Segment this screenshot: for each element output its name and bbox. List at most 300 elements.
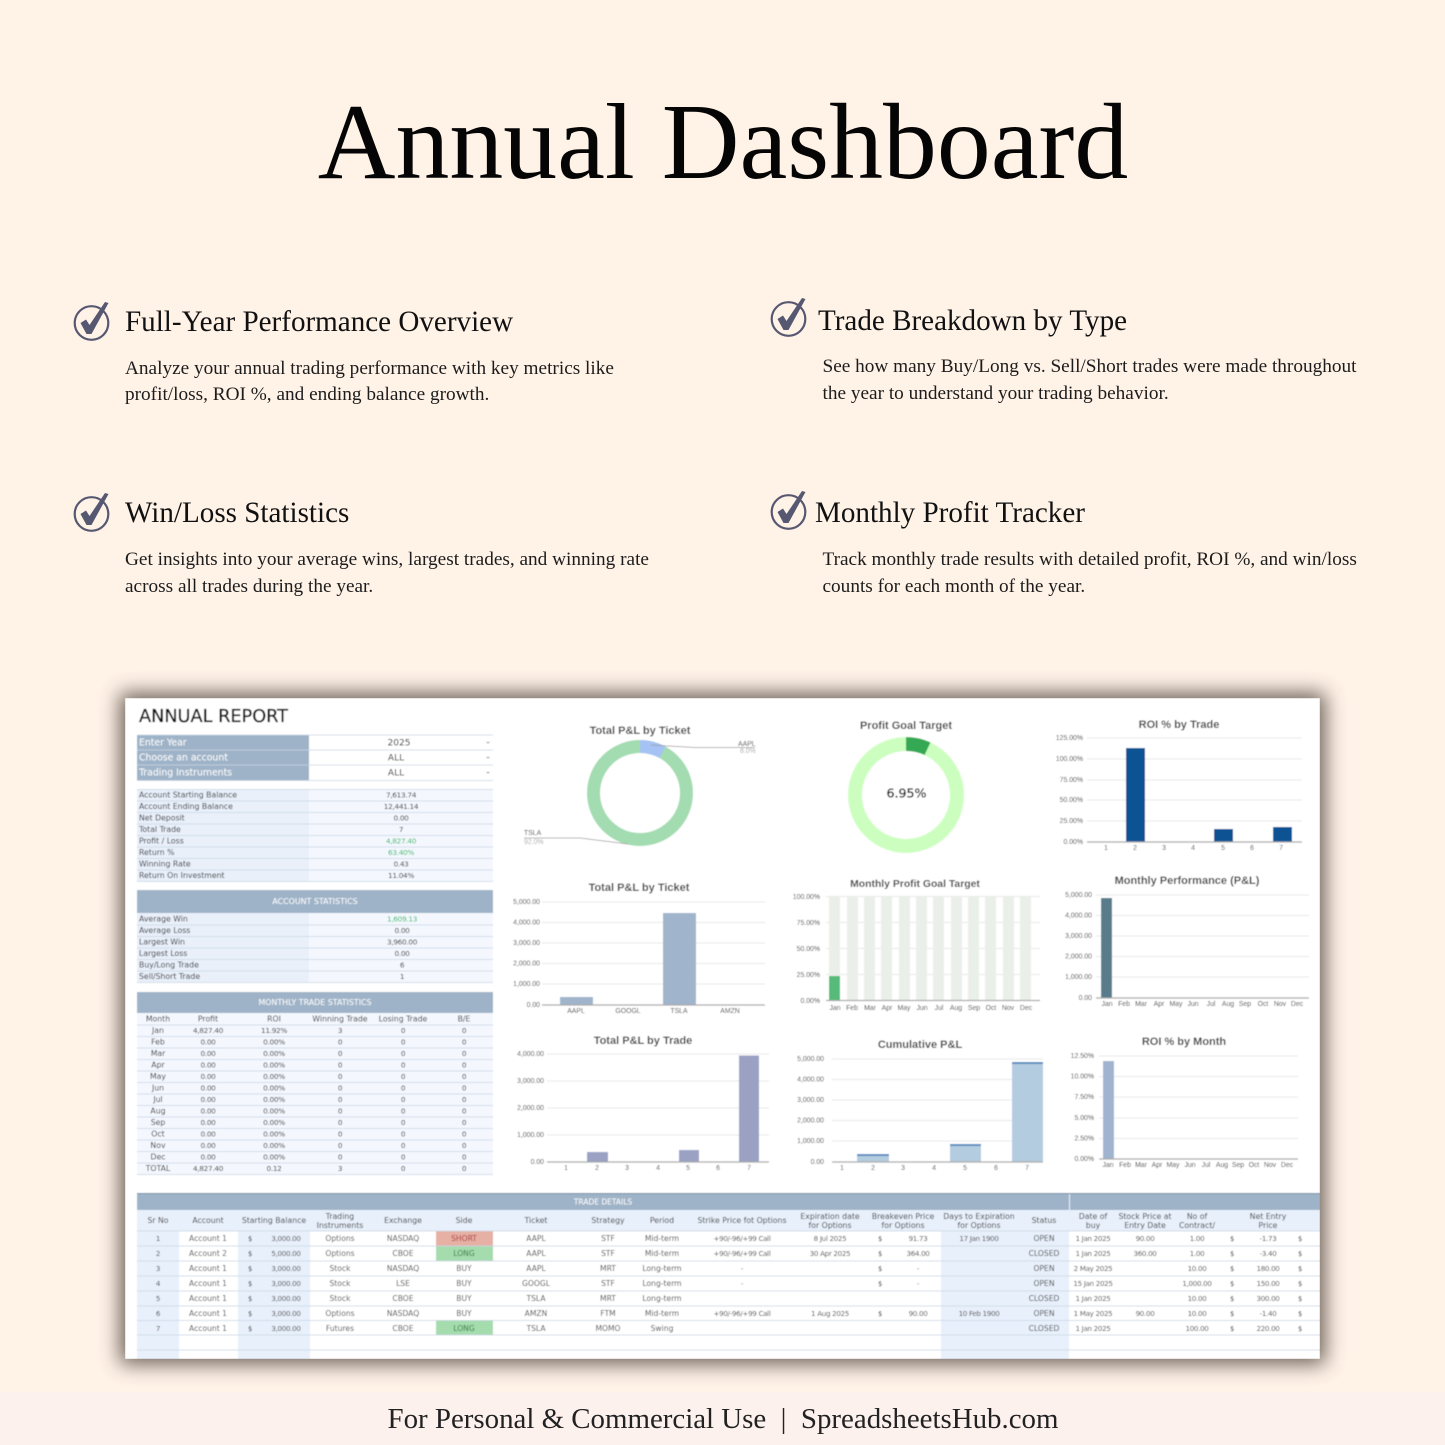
bar chart: monthly profit goal target: Aug [950,1005,962,1012]
bar chart: roi % by month: Feb [1119,1162,1131,1169]
bar chart: roi % by month: Mar [1135,1162,1148,1169]
trade rows: numeric columns: 300.00 [1256,1294,1280,1303]
panel: account summary table: 7,613.74 [386,790,417,800]
trade rows: text columns: NASDAQ [387,1309,419,1318]
panel: monthly trade statistics: 0.00% [263,1141,285,1150]
table column headers: for Options [808,1221,852,1230]
panel: monthly trade statistics: 0 [401,1118,406,1127]
feature heading: Full-Year Performance Overview [125,306,513,338]
bar chart: total p&l by ticket: AAPL [567,1008,585,1015]
bar chart: cumulative p&l: 4 [932,1165,936,1172]
panel: monthly trade statistics: 0 [338,1038,343,1046]
bar chart: monthly performance: Jan [1101,1001,1113,1008]
trade rows: numeric columns: $ [1298,1294,1302,1303]
bar chart: roi % by trade: 2 [1133,845,1137,852]
bar chart: monthly performance: Aug [1222,1001,1234,1008]
panel: account statistics: 6 [400,960,405,970]
panel: account statistics: 0.00 [394,949,410,958]
panel: report filters [137,735,493,780]
panel: monthly trade statistics: 0 [462,1060,467,1070]
panel: monthly trade statistics: 0 [338,1106,343,1116]
table column headers: No of [1187,1212,1208,1221]
panel: account summary table: 63.40% [388,848,414,857]
panel: report filters: 2025 [388,738,410,748]
panel: monthly trade statistics: 0 [462,1072,467,1081]
panel: account summary table: Account Starting Balance [139,790,237,800]
trade rows: numeric columns: $ [1298,1264,1302,1273]
panel: monthly trade statistics: 0.00 [200,1106,216,1116]
panel: account statistics: ACCOUNT STATISTICS [272,897,358,906]
panel: monthly trade statistics: Feb [151,1038,165,1046]
trade rows: text columns: OPEN [1033,1309,1055,1318]
panel: monthly trade statistics: 4,827.40 [193,1026,224,1035]
bar chart: monthly profit goal target: Monthly Profit Goal Target [850,879,980,890]
trade rows: text columns: Futures [326,1324,354,1333]
donut chart: total p&l by ticket [524,725,756,846]
table column headers: Sr No [147,1216,169,1225]
trade rows: numeric columns: $ [878,1264,882,1273]
bar chart: roi % by trade: ROI % by Trade [1139,719,1219,731]
panel: monthly trade statistics: 0 [462,1038,467,1046]
trade rows: numeric columns: -1.40 [1260,1309,1277,1318]
table column headers: for Options [957,1221,1001,1230]
trade rows: text columns: AMZN [525,1309,547,1318]
panel: monthly trade statistics: 0.00 [200,1084,216,1092]
trade rows: text columns: MOMO [595,1324,621,1333]
trade rows: text columns: FTM [600,1309,616,1318]
icon: check badge [772,491,806,529]
trade rows: numeric columns: +90/-96/+99 Call [713,1309,771,1318]
bar chart: monthly performance: 4,000.00 [1065,912,1092,920]
bar chart: monthly profit goal target: Jan [829,1005,841,1012]
table column headers: Period [650,1216,674,1225]
trade rows: text columns: LONG [453,1324,475,1333]
trade rows: text columns: GOOGL [522,1279,551,1288]
bar chart: total p&l by trade: 2 [595,1165,599,1172]
trade rows: numeric columns: 1 May 2025 [1074,1309,1112,1318]
panel: account statistics: 1 [400,972,404,981]
bar chart: cumulative p&l: 3 [901,1165,905,1172]
table column headers: Exchange [384,1216,422,1225]
panel: monthly trade statistics: 0.00 [200,1049,216,1058]
table column headers: Stock Price at [1118,1212,1172,1221]
donut chart: profit goal target: Profit Goal Target [860,720,952,732]
bar chart: monthly performance: Oct [1258,1001,1268,1008]
feature heading: Monthly Profit Tracker [815,497,1085,529]
feature description: the year to understand your trading behavior. [822,383,1169,404]
bar chart: monthly performance [1065,875,1309,1008]
bar chart: monthly performance: Nov [1274,1001,1287,1008]
bar chart: total p&l by trade: 7 [747,1165,751,1172]
trade rows: text columns: Long-term [642,1279,682,1288]
trade rows: numeric columns: 1 Jan 2025 [1075,1249,1111,1258]
table column headers: Date of [1079,1212,1107,1221]
bar chart: monthly profit goal target: 75.00% [797,920,820,927]
panel: monthly trade statistics: B/E [458,1014,471,1024]
trade rows: text columns: Swing [651,1324,674,1333]
trade rows: numeric columns: 30 Apr 2025 [810,1249,850,1258]
panel: monthly trade statistics: 0 [338,1084,343,1092]
panel: monthly trade statistics: 4,827.40 [193,1164,224,1173]
dashboard screenshot shadow [120,693,1325,1364]
trade rows: text columns: Mid-term [645,1234,679,1243]
trade rows: numeric columns: 1.00 [1190,1249,1205,1258]
bar chart: cumulative p&l: 5,000.00 [797,1056,824,1063]
panel: account summary table: Winning Rate [139,860,191,868]
bar chart: total p&l by trade: 4,000.00 [517,1051,544,1058]
panel: account statistics: 3,960.00 [387,938,418,946]
bar chart: roi % by trade: 25.00% [1060,818,1083,825]
table column headers: for Options [881,1221,925,1230]
panel: monthly trade statistics: 0.00 [200,1118,216,1127]
trade rows: text columns: BUY [456,1294,472,1303]
bar chart: roi % by month: 2.50% [1074,1136,1094,1142]
bar chart: total p&l by ticket: Total P&L by Ticket [589,882,690,894]
trade rows: text columns: TSLA [525,1294,546,1303]
panel: monthly trade statistics: 0 [338,1152,343,1162]
trade rows: text columns: MRT [600,1294,616,1303]
trade rows: numeric columns: 2 [156,1249,160,1258]
trade rows: numeric columns: $ [248,1234,252,1243]
feature description: See how many Buy/Long vs. Sell/Short trades were made throughout [822,356,1357,377]
trade rows: text columns: Account 1 [189,1264,227,1273]
trade rows: numeric columns: +90/-96/+99 Call [713,1249,771,1258]
panel: monthly trade statistics: 0 [338,1141,343,1150]
bar chart: roi % by trade: 75.00% [1060,777,1083,784]
donut chart: total p&l by ticket: Total P&L by Ticket [590,725,691,737]
bar chart: roi % by month: Aug [1216,1162,1228,1169]
trade rows: numeric columns: -3.40 [1260,1249,1277,1258]
panel: monthly trade statistics: 0 [338,1049,343,1058]
bar chart: roi % by trade: 0.00% [1063,839,1083,846]
panel: monthly trade statistics: 0 [401,1084,406,1092]
bar chart: cumulative p&l: 2 [871,1165,875,1172]
panel: monthly trade statistics: 0 [462,1130,467,1138]
trade rows: text columns: CLOSED [1029,1249,1059,1258]
trade rows: numeric columns: 5,000.00 [271,1249,301,1258]
panel: monthly trade statistics: Jun [151,1084,164,1092]
bar chart: roi % by trade [1056,719,1302,852]
trade rows: numeric columns: 10.00 [1188,1264,1207,1273]
panel: monthly trade statistics: 0 [462,1084,467,1092]
panel: account statistics: 0.00 [394,926,410,935]
trade rows: numeric columns: 90.00 [909,1309,928,1318]
trade rows: text columns: AAPL [526,1264,546,1273]
bar chart: total p&l by ticket [513,882,765,1015]
panel: account summary table: Net Deposit [139,814,185,822]
table column headers: Starting Balance [242,1216,306,1225]
trade rows: text columns: OPEN [1033,1279,1055,1288]
feature description: Analyze your annual trading performance with key metrics like [125,358,614,379]
bar chart: roi % by trade: 7 [1279,845,1283,852]
panel: report filters: ALL [388,754,404,764]
panel: monthly trade statistics: 0 [338,1072,343,1081]
bar chart: total p&l by trade: 2,000.00 [517,1105,544,1112]
table column headers: Ticket [524,1216,547,1225]
bar chart: monthly profit goal target: Jun [916,1005,928,1012]
trade rows: numeric columns: $ [1298,1324,1302,1333]
panel: account summary table: 4,827.40 [386,836,417,846]
panel: monthly trade statistics: 0 [462,1152,467,1162]
trade rows: numeric columns: - [917,1264,920,1273]
bar chart: roi % by month: Sep [1232,1162,1244,1169]
trade rows: text columns: Long-term [642,1294,682,1303]
trade rows: text columns: Options [325,1249,355,1258]
trade rows: numeric columns: 1.00 [1190,1234,1205,1243]
panel: monthly trade statistics: 0 [401,1141,406,1150]
title: Annual Dashboard [318,83,1128,202]
bar chart: roi % by trade: 100.00% [1056,756,1083,763]
panel: monthly trade statistics: Apr [151,1060,166,1070]
table column headers: Trading [325,1212,354,1221]
feature: full-year performance overview [75,302,614,405]
panel: monthly trade statistics: 0.00% [263,1130,285,1138]
bar chart: cumulative p&l: 2,000.00 [797,1118,824,1124]
bar chart: roi % by trade: 125.00% [1056,735,1083,742]
bar chart: total p&l by trade: 5 [686,1165,690,1172]
bar chart: monthly performance: Dec [1291,1001,1304,1008]
panel: monthly trade statistics: Mar [151,1049,166,1058]
trade rows: numeric columns: $ [1230,1249,1234,1258]
trade rows: numeric columns: 6 [156,1309,161,1318]
trade rows: numeric columns: $ [248,1279,252,1288]
bar chart: monthly performance: Monthly Performance (P&L) [1115,875,1260,887]
panel: account statistics: Buy/Long Trade [139,960,199,970]
bar chart: cumulative p&l [797,1039,1043,1172]
table column headers: Strategy [591,1216,625,1225]
trade rows: numeric columns: $ [1230,1294,1234,1303]
panel: monthly trade statistics: 0.00 [200,1060,216,1070]
bar chart: roi % by trade: 1 [1104,845,1108,852]
panel: monthly trade statistics: 0.00 [200,1130,216,1138]
panel: monthly trade statistics: 0.00 [200,1072,216,1081]
trade rows: numeric columns [156,1234,1302,1333]
panel: monthly trade statistics: 0.12 [266,1164,282,1173]
trade rows: numeric columns: 10.00 [1188,1294,1207,1303]
trade rows: numeric columns: 1 Aug 2025 [811,1309,849,1318]
panel: monthly trade statistics: May [150,1072,166,1081]
trade rows: numeric columns: $ [878,1234,882,1243]
bar chart: monthly performance: Mar [1135,1001,1148,1008]
trade rows: text columns: Options [325,1234,355,1243]
panel: monthly trade statistics: 0 [401,1164,406,1173]
panel: monthly trade statistics: 0.00% [263,1118,285,1127]
table column headers: Days to Expiration [943,1212,1015,1221]
bar chart: cumulative p&l: Cumulative P&L [878,1039,962,1051]
trade rows: text columns: Stock [329,1279,351,1288]
panel: monthly trade statistics: 3 [338,1026,343,1035]
bar chart: monthly profit goal target: Sep [968,1005,980,1012]
feature description: Get insights into your average wins, largest trades, and winning rate [125,549,649,570]
panel: monthly trade statistics: 0 [401,1026,406,1035]
panel: account statistics: 1,609.13 [387,914,418,924]
donut chart: total p&l by ticket: AAPL [738,741,756,748]
table column headers: Strike Price fot Options [698,1216,786,1225]
bar chart: monthly profit goal target: Dec [1020,1005,1033,1012]
trade rows: text columns: Options [325,1309,355,1318]
trade rows: numeric columns: 2 May 2025 [1074,1264,1112,1273]
trade rows: text columns: MRT [600,1264,616,1273]
bar chart: total p&l by trade: 1,000.00 [517,1132,544,1139]
panel: report filters: Trading Instruments [138,768,232,778]
panel: monthly trade statistics: 0.00 [200,1095,216,1104]
trade rows: text columns: STF [601,1234,615,1243]
bar chart: total p&l by ticket: TSLA [670,1008,688,1015]
bar chart: roi % by trade: 5 [1221,845,1225,852]
bar chart: total p&l by ticket: 2,000.00 [513,960,540,968]
trade rows: numeric columns: - [741,1264,744,1273]
bar chart: total p&l by trade: 1 [564,1165,568,1172]
bar chart: roi % by month: Jan [1102,1162,1114,1169]
trade rows: numeric columns: $ [248,1309,252,1318]
trade rows: text columns: Stock [329,1264,351,1273]
panel: account statistics: Largest Loss [139,949,187,958]
trade rows: numeric columns: 17 Jan 1900 [959,1234,999,1243]
trade rows: text columns: Mid-term [645,1249,679,1258]
trade rows: numeric columns: 1 Jan 2025 [1075,1324,1111,1333]
trade rows: numeric columns: 3 [156,1264,160,1273]
bar chart: cumulative p&l: 7 [1025,1165,1029,1172]
panel: monthly trade statistics: 0 [462,1164,467,1173]
bar chart: total p&l by trade: 3,000.00 [517,1078,544,1085]
donut chart: total p&l by ticket: TSLA [524,830,542,837]
trade rows: numeric columns: $ [1230,1324,1234,1333]
bar chart: monthly profit goal target: Jul [935,1005,944,1012]
bar chart: roi % by month: Oct [1249,1162,1259,1169]
panel: account summary table: 11.04% [388,871,414,880]
table column headers: Account [192,1216,224,1225]
panel: monthly trade statistics: Jan [151,1026,164,1035]
trade rows: numeric columns: 3,000.00 [271,1309,301,1318]
table column headers [147,1212,1287,1230]
donut chart: profit goal target [855,720,957,846]
panel: account statistics: Sell/Short Trade [139,972,200,981]
table column headers: Instruments [317,1221,363,1230]
panel: account summary table: 0.43 [393,860,409,868]
panel: account statistics: Largest Win [139,938,185,946]
panel: monthly trade statistics: 0 [462,1106,467,1116]
trade rows: text columns: OPEN [1033,1264,1055,1273]
trade rows: numeric columns: 3,000.00 [271,1264,301,1273]
trade rows: text columns: Account 2 [189,1249,227,1258]
trade rows: numeric columns: 90.00 [1136,1234,1155,1243]
trade rows: text columns: STF [601,1249,615,1258]
panel: monthly trade statistics: 0.00% [263,1152,285,1162]
trade rows: text columns: NASDAQ [387,1264,419,1273]
bar chart: roi % by trade: 4 [1191,845,1195,852]
trade rows: numeric columns: +90/-96/+99 Call [713,1234,771,1243]
panel: monthly trade statistics: 0 [462,1095,467,1104]
panel: monthly trade statistics: 0.00% [263,1106,285,1116]
trade rows: numeric columns: - [741,1279,744,1288]
bar chart: total p&l by trade [517,1035,769,1172]
bar chart: cumulative p&l: 6 [994,1165,998,1172]
bar chart: cumulative p&l: 5 [963,1165,967,1172]
bar chart: total p&l by ticket: AMZN [720,1008,740,1015]
bar chart: total p&l by ticket: 5,000.00 [513,899,540,906]
panel: monthly trade statistics: 0 [401,1106,406,1116]
table column headers: Expiration date [800,1212,860,1221]
bar chart: total p&l by ticket: 1,000.00 [513,981,540,988]
trade rows: numeric columns: 1,000.00 [1182,1279,1212,1288]
bar chart: monthly profit goal target: Apr [882,1005,893,1012]
panel: monthly trade statistics: 3 [338,1164,343,1173]
panel: monthly trade statistics: 0 [462,1141,467,1150]
bar chart: monthly profit goal target: 25.00% [797,972,820,979]
trade rows: text columns: Account 1 [189,1234,227,1243]
trade rows: text columns: STF [601,1279,615,1288]
bar chart: monthly profit goal target: 50.00% [797,946,820,953]
panel: account statistics: Average Loss [139,926,190,935]
trade rows: numeric columns: $ [1298,1309,1302,1318]
feature: monthly profit tracker [772,491,1357,597]
trade rows: text columns: Account 1 [189,1324,227,1333]
trade rows: numeric columns: $ [248,1264,252,1273]
panel: monthly trade statistics: Winning Trade [312,1014,368,1024]
panel: dashboard screenshot [125,698,1320,1359]
panel: monthly trade statistics [137,992,493,1174]
panel: account summary table: Profit / Loss [139,836,184,846]
trade rows: numeric columns: - [917,1279,920,1288]
bar chart: monthly performance: 3,000.00 [1065,933,1092,940]
bar chart: monthly profit goal target: 0.00% [800,998,820,1005]
trade rows: text columns: Long-term [642,1264,682,1273]
panel: monthly trade statistics: 0 [401,1072,406,1081]
trade rows: numeric columns: $ [1230,1264,1234,1273]
panel: report filters: Enter Year [139,738,187,748]
trade rows: numeric columns: 3,000.00 [271,1234,301,1243]
bar chart: roi % by month: ROI % by Month [1142,1036,1226,1048]
panel: monthly trade statistics: 0.00% [263,1060,285,1070]
panel: monthly trade statistics: 0 [462,1049,467,1058]
trade rows: numeric columns: 4 [156,1279,161,1288]
bar chart: cumulative p&l: 1,000.00 [797,1138,824,1145]
panel: trade details table: TRADE DETAILS [573,1198,632,1206]
bar chart: total p&l by trade: 0.00 [531,1159,544,1166]
panel: monthly trade statistics: 11.92% [261,1026,287,1035]
trade rows: text columns: Account 1 [189,1309,227,1318]
bar chart: roi % by month: Nov [1264,1162,1277,1169]
panel: report filters: ALL [388,768,404,778]
trade rows: text columns: LONG [453,1249,475,1258]
table column headers: buy [1086,1221,1101,1230]
bar chart: cumulative p&l: 1 [840,1165,844,1172]
bar chart: monthly profit goal target: Oct [986,1005,996,1012]
trade rows: numeric columns: $ [248,1324,252,1333]
panel: trade details table [137,1193,1320,1359]
trade rows: numeric columns: 15 Jan 2025 [1073,1279,1113,1288]
trade rows: numeric columns: $ [1298,1234,1302,1243]
panel: report filters: Choose an account [139,752,228,764]
bar chart: total p&l by ticket: GOOGL [615,1008,641,1015]
bar chart: total p&l by trade: Total P&L by Trade [594,1035,692,1047]
trade rows: numeric columns: 10 Feb 1900 [959,1309,1000,1318]
bar chart: monthly performance: 0.00 [1079,995,1092,1002]
bar chart: roi % by month: 12.50% [1071,1053,1094,1060]
feature description: across all trades during the year. [125,576,373,597]
bar chart: monthly profit goal target: 100.00% [793,894,820,901]
panel: monthly trade statistics: Losing Trade [379,1014,428,1024]
bar chart: roi % by month [1071,1036,1298,1169]
bar chart: total p&l by ticket: 3,000.00 [513,940,540,947]
trade rows: numeric columns: -1.73 [1260,1234,1276,1243]
bar chart: monthly profit goal target: May [897,1005,911,1012]
bar chart: roi % by month: 10.00% [1071,1074,1094,1080]
panel: monthly trade statistics: Dec [150,1152,166,1162]
panel: monthly trade statistics: 0.00 [200,1038,216,1046]
bar chart: total p&l by ticket: 4,000.00 [513,920,540,926]
table column headers: Price [1259,1221,1278,1230]
